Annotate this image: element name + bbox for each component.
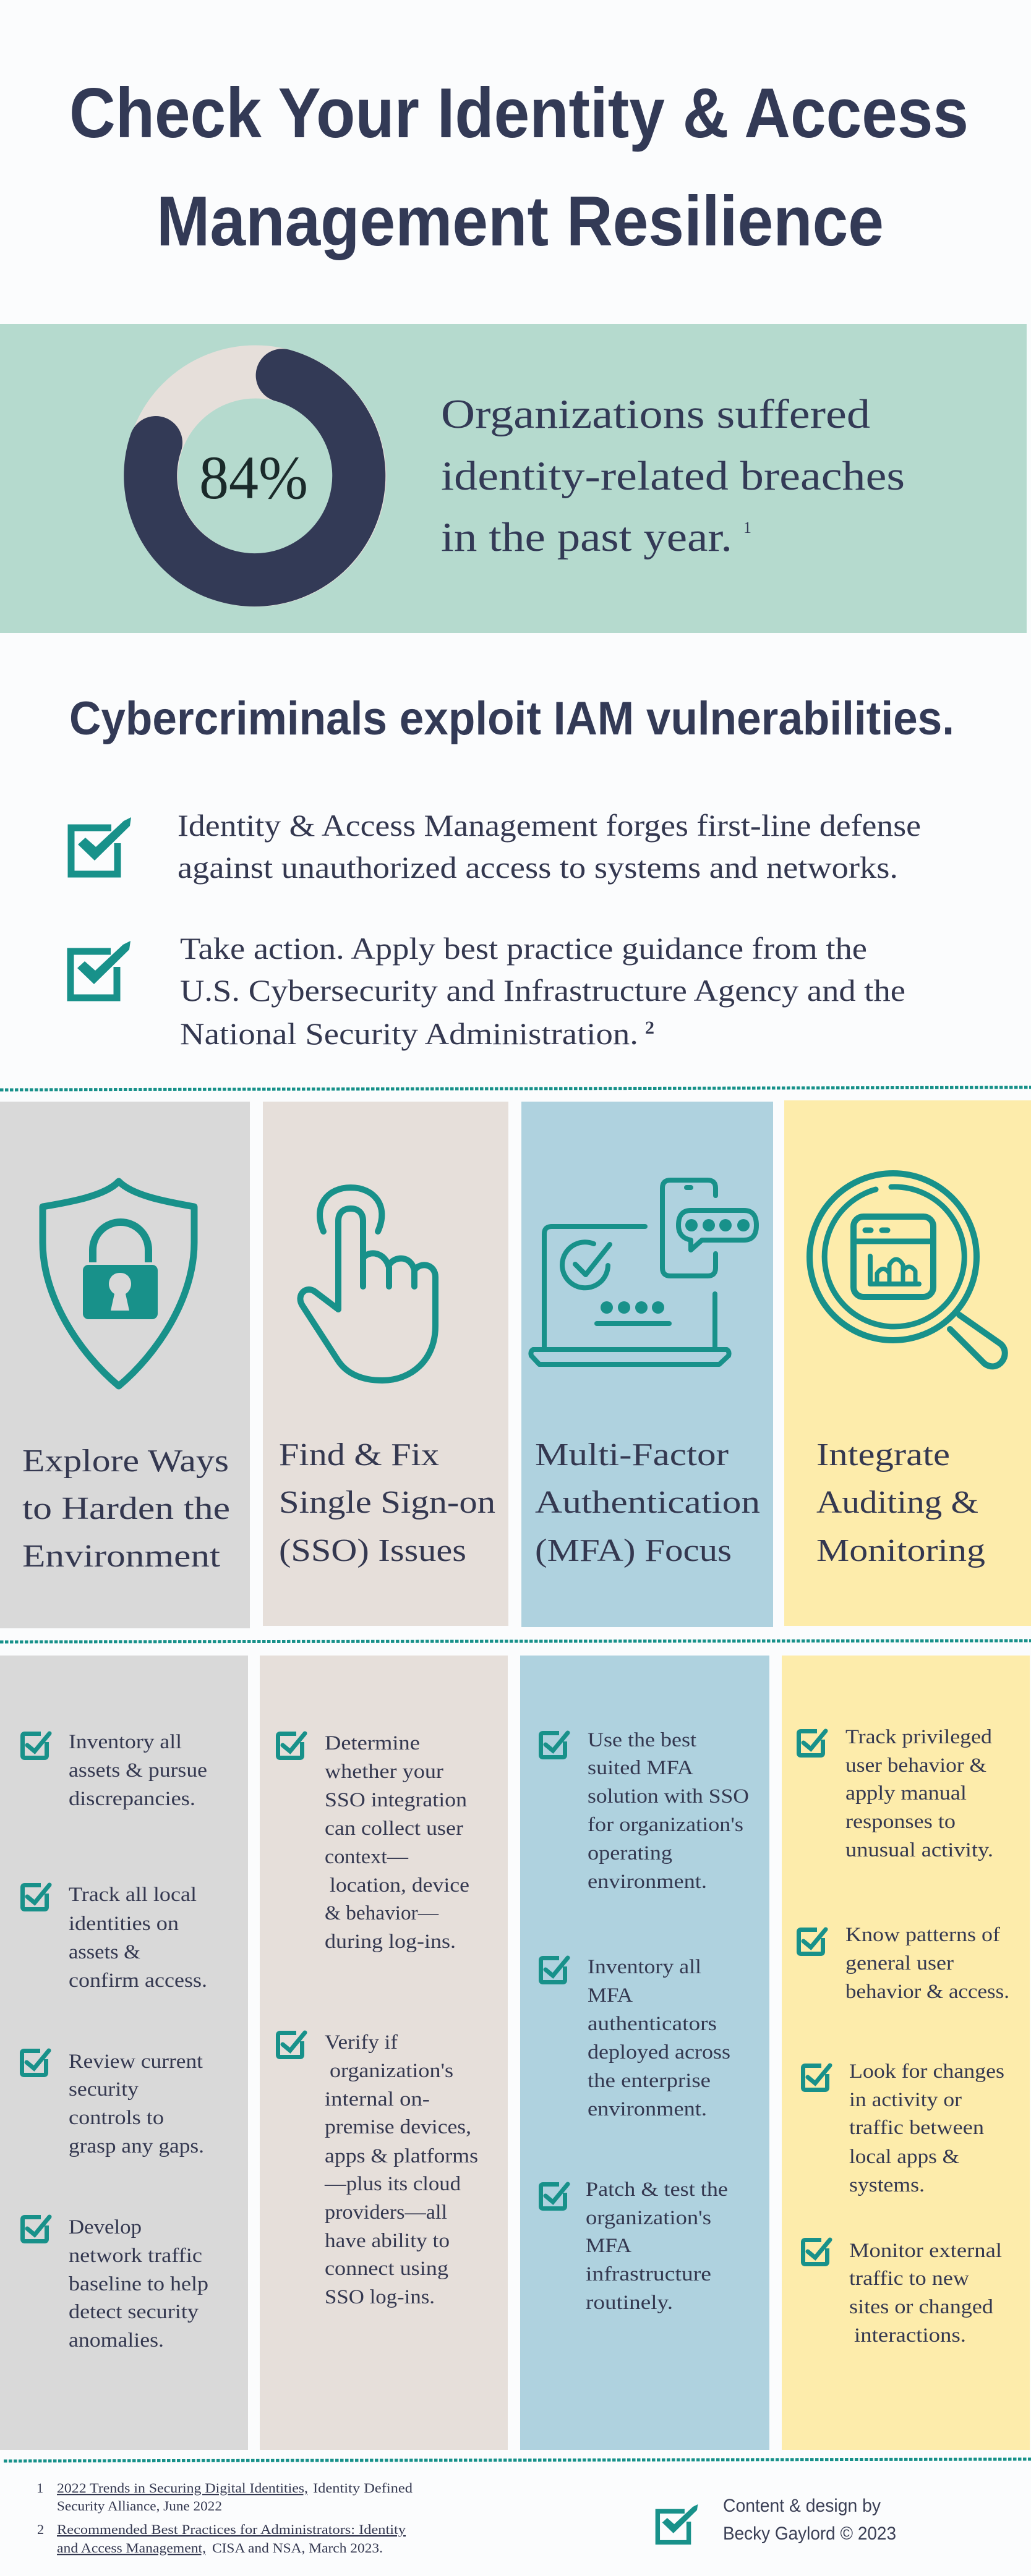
checklist item: interactions. [854, 2324, 966, 2347]
checklist item [22, 2216, 208, 2352]
checklist item: SSO log-ins. [325, 2286, 435, 2308]
icon: laptop and phone [531, 1180, 756, 1364]
checklist item: confirm access. [69, 1970, 207, 1992]
checklist item: Look for changes [849, 2060, 1004, 2083]
checklist item: for organization's [588, 1814, 743, 1836]
text block: take action [180, 931, 905, 1051]
panel: checklist harden [0, 1656, 248, 2450]
heading: (MFA) Focus [535, 1533, 732, 1568]
checklist item: authenticators [588, 2013, 717, 2035]
checklist item: controls to [69, 2107, 164, 2129]
checklist item: premise devices, [325, 2116, 471, 2138]
checklist item [541, 1956, 730, 2120]
footnotes: 2 [37, 2522, 44, 2537]
checklist item: organization's [330, 2060, 453, 2082]
checklist item [799, 1726, 993, 1861]
checklist item: local apps & [849, 2146, 959, 2168]
checklist item: Patch & test the [586, 2179, 728, 2201]
checklist item: & behavior— [325, 1902, 439, 1924]
text block: take action: Take action. Apply best practice guidance from the [180, 931, 867, 966]
donut chart: 84%: 84% [199, 443, 308, 512]
checklist item: baseline to help [69, 2273, 208, 2295]
checklist item: providers—all [325, 2201, 447, 2224]
title: Management Resilience [156, 182, 884, 261]
icon: credit check [657, 2504, 698, 2543]
footnotes: Recommended Best Practices for Administrators: Identity [57, 2522, 406, 2537]
checklist item: user behavior & [845, 1754, 986, 1777]
checklist item [803, 2240, 1002, 2347]
checklist item: discrepancies. [69, 1788, 195, 1810]
footnotes: Security Alliance, June 2022 [57, 2498, 222, 2514]
checklist item: solution with SSO [588, 1785, 749, 1808]
checklist item [803, 2060, 1004, 2196]
panel: 84% statistic band [0, 324, 1027, 633]
statistic text: in the past year. [441, 514, 732, 560]
heading: Explore Ways [22, 1443, 229, 1479]
checklist item [541, 2179, 728, 2314]
checklist item: unusual activity. [845, 1839, 993, 1861]
heading [535, 1437, 760, 1568]
checklist item: grasp any gaps. [69, 2135, 204, 2157]
heading: Authentication [535, 1485, 760, 1520]
heading [816, 1437, 985, 1568]
statistic text: identity-related breaches [441, 453, 905, 499]
checklist item: the enterprise [588, 2070, 711, 2092]
checklist item: have ability to [325, 2230, 450, 2252]
checklist item: apply manual [845, 1782, 967, 1804]
heading: Single Sign-on [279, 1485, 495, 1520]
heading: Monitoring [816, 1533, 985, 1568]
checklist item [22, 1884, 207, 1992]
checklist item: connect using [325, 2258, 448, 2280]
checklist item: Know patterns of [845, 1924, 1000, 1946]
checklist item: routinely. [586, 2292, 673, 2314]
heading: (SSO) Issues [279, 1533, 466, 1568]
checklist item [22, 1731, 207, 1810]
footnotes: Identity Defined [313, 2480, 413, 2496]
checklist item: traffic to new [849, 2268, 969, 2290]
icon: large check 1 [71, 817, 131, 874]
checklist item [278, 2031, 478, 2308]
checklist item: detect security [69, 2301, 199, 2323]
checklist item: assets & pursue [69, 1759, 207, 1782]
checklist item: traffic between [849, 2117, 984, 2139]
checklist item: SSO integration [325, 1789, 467, 1811]
footnotes [36, 2480, 413, 2556]
checklist item: deployed across [588, 2041, 730, 2064]
checklist item: internal on- [325, 2088, 430, 2111]
checklist item: MFA [588, 1984, 633, 2007]
checklist item: suited MFA [588, 1757, 693, 1779]
panel: harden the environment [0, 1102, 250, 1628]
checklist item: identities on [69, 1913, 179, 1935]
credit text [723, 2496, 896, 2544]
panel: checklist SSO [260, 1656, 508, 2450]
credit text: Content & design by [723, 2496, 881, 2516]
checklist item: Inventory all [588, 1956, 701, 1978]
checklist item [278, 1732, 469, 1953]
checklist item: Use the best [588, 1729, 696, 1751]
heading [22, 1443, 230, 1574]
statistic text [441, 391, 905, 560]
checklist item: network traffic [69, 2245, 202, 2267]
title [69, 74, 969, 261]
text block: IAM defense: against unauthorized access to systems and networks. [178, 850, 898, 885]
checklist item: anomalies. [69, 2329, 164, 2352]
heading: Environment [22, 1539, 221, 1574]
checklist item: security [69, 2078, 139, 2101]
heading: Auditing & [816, 1485, 978, 1520]
checklist item: MFA [586, 2235, 631, 2257]
checklist item: operating [588, 1842, 672, 1864]
checklist item: sites or changed [849, 2296, 994, 2318]
checklist item: Monitor external [849, 2240, 1002, 2262]
panel: checklist auditing [782, 1656, 1030, 2450]
text block: IAM defense [178, 808, 921, 885]
checklist item: Review current [69, 2051, 203, 2073]
text block: IAM defense: Identity & Access Management forges first-line defense [178, 808, 921, 843]
footnotes: 2022 Trends in Securing Digital Identities, [57, 2480, 308, 2496]
icon: shield with lock [43, 1181, 194, 1386]
footnotes: and Access Management, [57, 2540, 206, 2556]
footnotes: 1 [36, 2480, 43, 2496]
checklist item: general user [845, 1952, 954, 1975]
checklist item: location, device [330, 1874, 469, 1897]
checklist item: systems. [849, 2174, 925, 2196]
checklist item: behavior & access. [845, 1981, 1009, 2003]
checklist item: Develop [69, 2216, 142, 2238]
text block: take action: U.S. Cybersecurity and Infrastructure Agency and the [180, 973, 905, 1008]
heading: cybercriminals: Cybercriminals exploit IAM vulnerabilities. [69, 692, 954, 745]
heading [279, 1437, 495, 1568]
checklist item: Track privileged [845, 1726, 993, 1748]
heading: Find & Fix [279, 1437, 439, 1473]
checklist item [22, 2051, 204, 2157]
panel: multi-factor authentication [521, 1102, 773, 1627]
checklist item: Track all local [69, 1884, 197, 1906]
checklist item: context— [325, 1846, 409, 1868]
icon: pointing hand [300, 1188, 435, 1380]
checklist item: environment. [588, 2098, 707, 2120]
checklist item: organization's [586, 2207, 711, 2229]
icon: magnifier with dashboard [810, 1173, 1005, 1366]
statistic text: 1 [743, 519, 751, 537]
title: Check Your Identity & Access [69, 74, 969, 153]
checklist item: infrastructure [586, 2263, 711, 2285]
text block: take action: National Security Administration. [180, 1016, 638, 1051]
checklist item: whether your [325, 1761, 443, 1783]
donut chart: 84% [150, 372, 359, 580]
credit text: Becky Gaylord © 2023 [723, 2523, 896, 2544]
statistic text: Organizations suffered [441, 391, 870, 437]
checklist item: during log-ins. [325, 1931, 456, 1953]
checklist item [799, 1924, 1009, 2003]
text block: take action: 2 [645, 1018, 654, 1038]
checklist item: Determine [325, 1732, 420, 1754]
checklist item [541, 1729, 749, 1893]
heading: Integrate [816, 1437, 950, 1473]
checklist item: in activity or [849, 2089, 962, 2111]
panel: checklist MFA [520, 1656, 769, 2450]
checklist item: Verify if [325, 2031, 398, 2054]
checklist item: —plus its cloud [324, 2173, 461, 2195]
checklist item: Inventory all [69, 1731, 182, 1753]
footnotes: CISA and NSA, March 2023. [212, 2540, 383, 2556]
checklist item: assets & [69, 1941, 140, 1963]
checklist item: apps & platforms [325, 2145, 478, 2167]
panel: auditing and monitoring [784, 1100, 1031, 1626]
checklist item: can collect user [325, 1817, 463, 1840]
heading: to Harden the [22, 1491, 230, 1526]
heading: Multi-Factor [535, 1437, 729, 1473]
checklist item: responses to [845, 1811, 956, 1833]
checklist item: environment. [588, 1871, 707, 1893]
icon: large check 2 [71, 941, 130, 998]
panel: single sign-on [263, 1102, 508, 1626]
